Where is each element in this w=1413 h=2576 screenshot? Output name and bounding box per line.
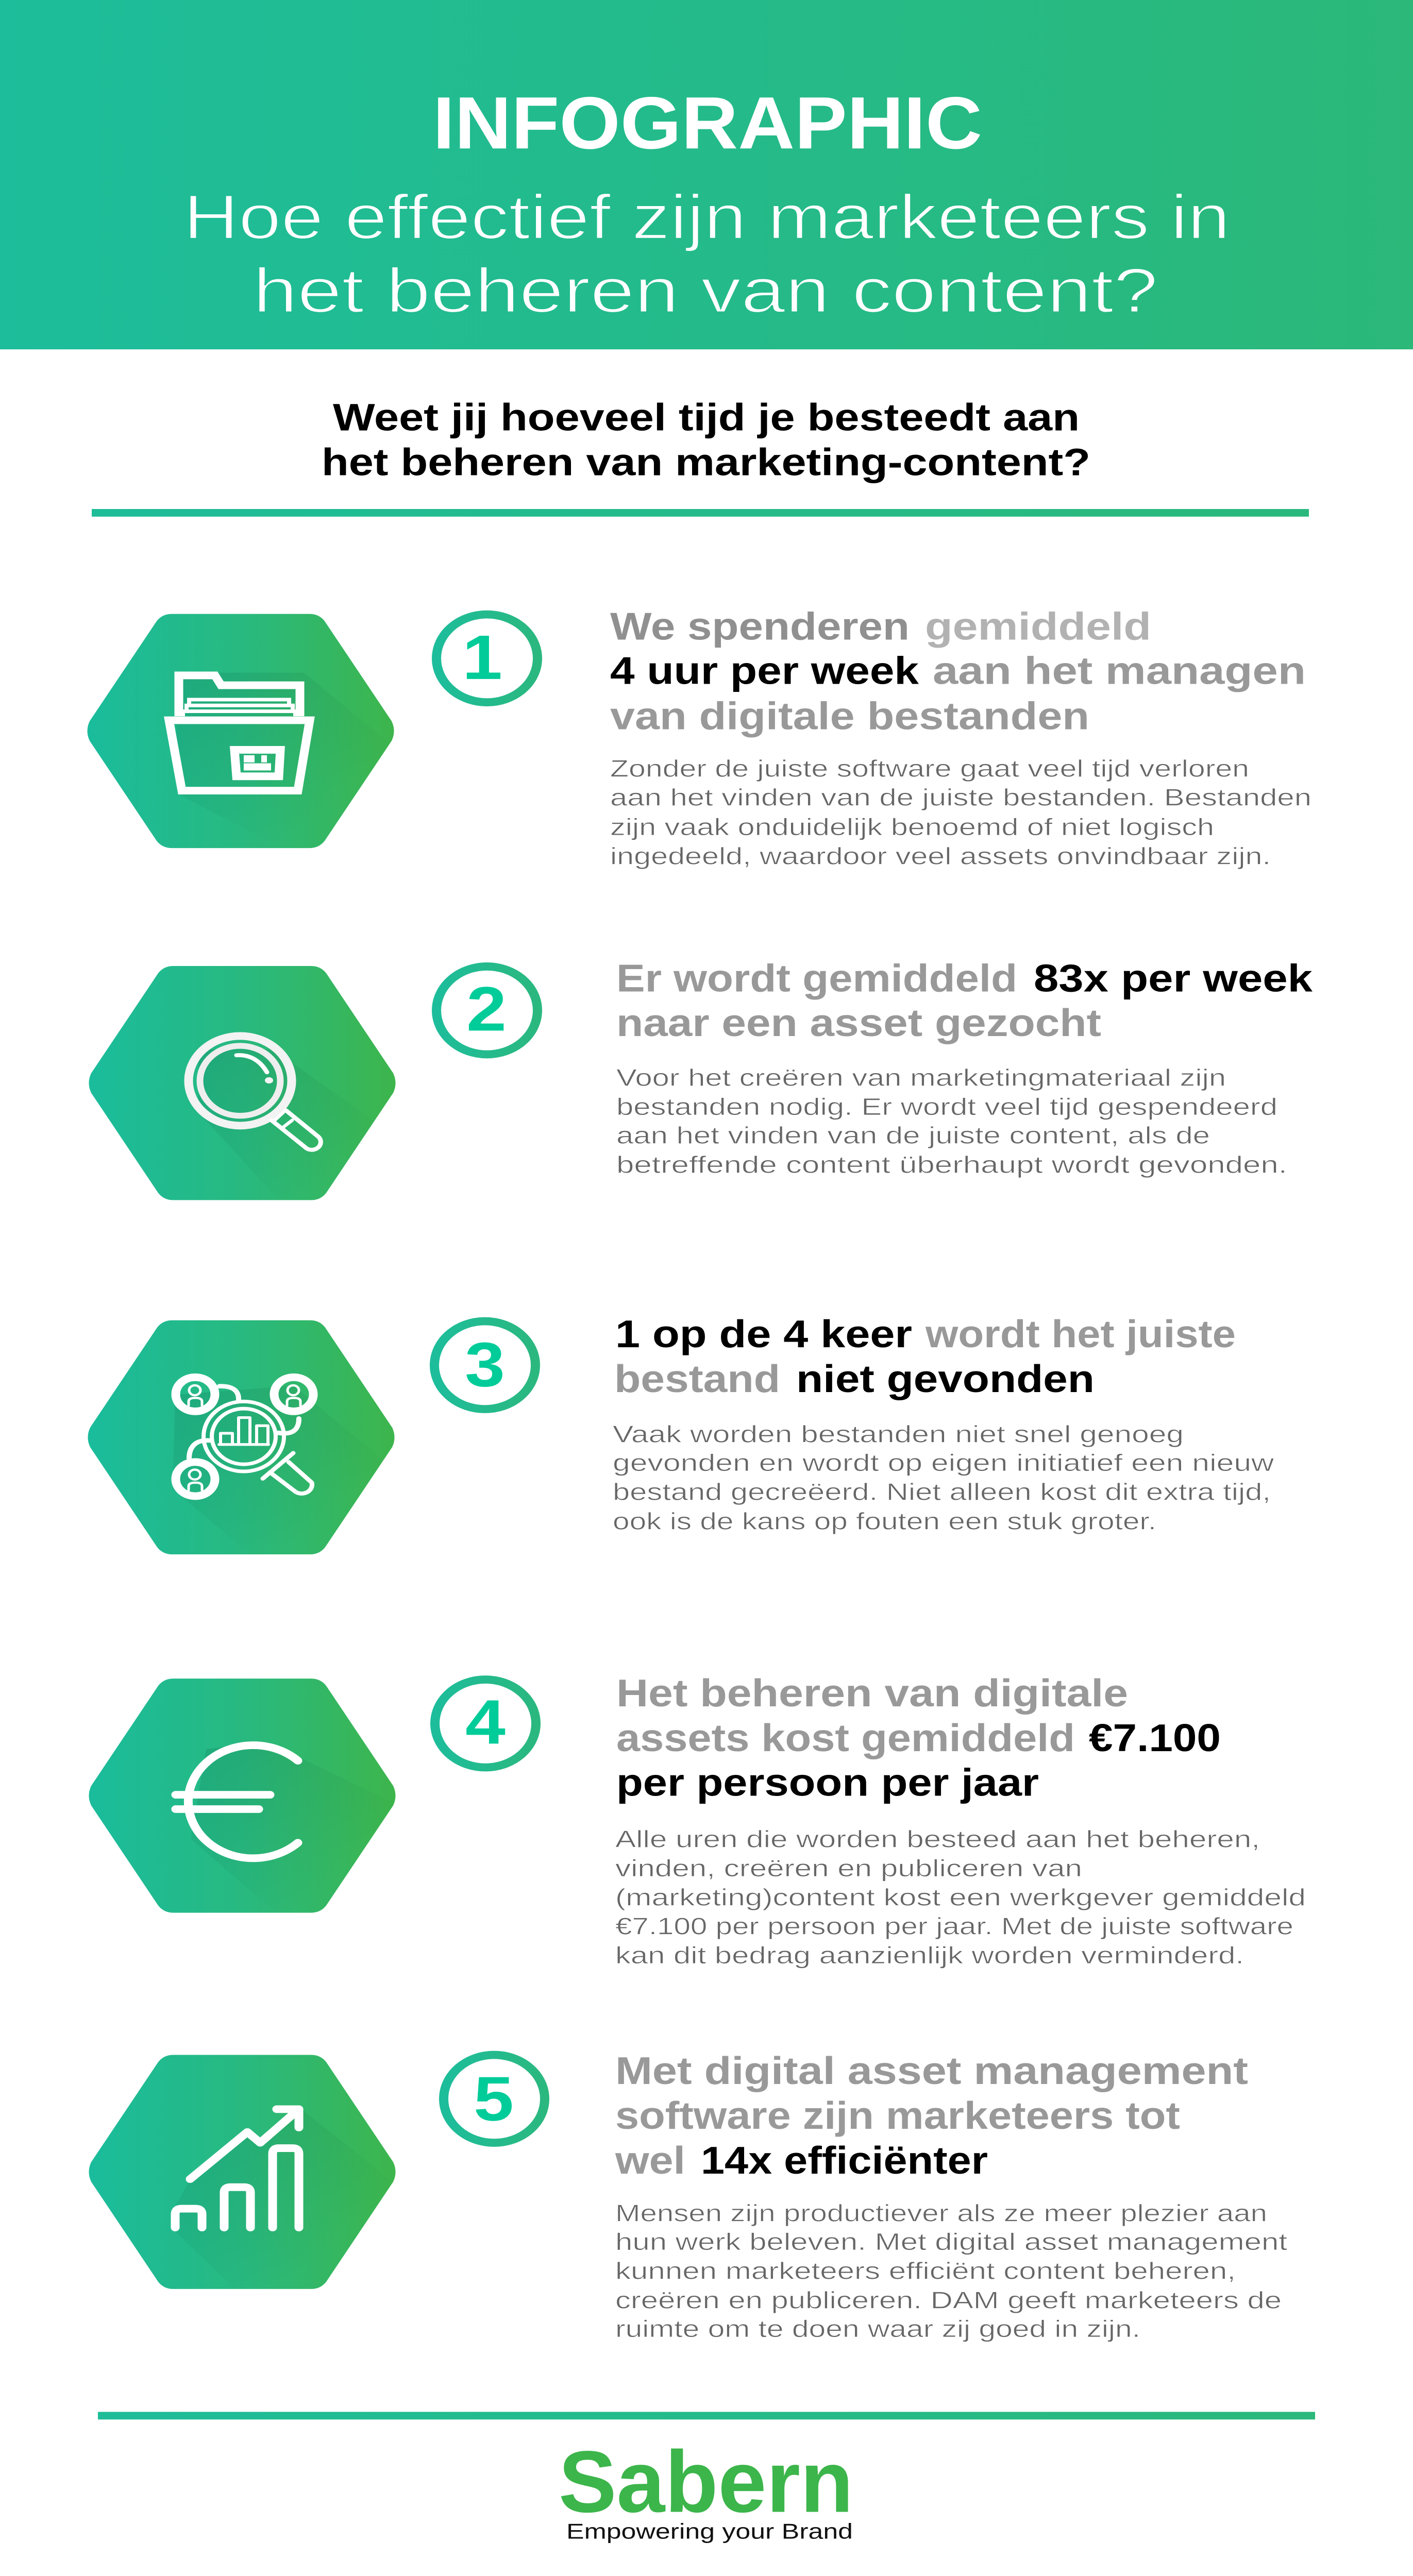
intro question: het beheren van marketing-content?: [322, 441, 1090, 483]
body text 3: bestand gecreëerd. Niet alleen kost dit extra tijd,: [613, 1479, 1271, 1505]
heading 5: [615, 2049, 1248, 2182]
top divider: [92, 509, 1309, 517]
body text 4: vinden, creëren en publiceren van: [615, 1855, 1082, 1882]
heading 5: software zijn marketeers tot: [615, 2094, 1180, 2138]
bottom divider: [98, 2412, 1315, 2419]
number badge 1: [436, 615, 537, 702]
intro question: Weet jij hoeveel tijd je besteedt aan: [333, 396, 1080, 438]
body text 3: [613, 1421, 1274, 1535]
logo: Sabern: Sabern: [559, 2433, 853, 2531]
title: INFOGRAPHIC: [433, 81, 982, 164]
body text 1: Zonder de juiste software gaat veel tijd verloren: [610, 755, 1249, 782]
heading 2: Er wordt gemiddeld: [616, 957, 1017, 1000]
intro question: [322, 396, 1090, 483]
subtitle: het beheren van content?: [253, 255, 1158, 326]
heading 1: 4 uur per week: [610, 650, 919, 692]
tagline: Empowering your Brand: [566, 2519, 853, 2544]
heading 3: bestand: [614, 1358, 780, 1401]
number badge 2: 2: [466, 974, 507, 1044]
body text 3: ook is de kans op fouten een stuk groter.: [613, 1508, 1156, 1535]
body text 5: Mensen zijn productiever als ze meer plezier aan: [615, 2200, 1267, 2227]
heading 3: 1 op de 4 keer: [615, 1313, 912, 1356]
number badge 3: [434, 1321, 535, 1409]
body text 1: aan het vinden van de juiste bestanden. Bestanden: [610, 784, 1311, 811]
body text 1: ingedeeld, waardoor veel assets onvindbaar zijn.: [610, 843, 1271, 870]
heading 4: per persoon per jaar: [616, 1761, 1039, 1804]
icon: hexagon with magnifying glass: [89, 966, 412, 1211]
panel: step 3: [88, 1313, 1274, 1561]
body text 4: [615, 1826, 1306, 1969]
heading 4: Het beheren van digitale: [616, 1672, 1128, 1715]
heading 4: €7.100: [1089, 1717, 1221, 1760]
body text 5: [615, 2200, 1287, 2342]
heading 1: We spenderen: [610, 605, 910, 648]
body text 5: kunnen marketeers efficiënt content beheren,: [615, 2258, 1236, 2284]
icon: hexagon with growth chart: [89, 2055, 412, 2296]
body text 3: gevonden en wordt op eigen initiatief een nieuw: [613, 1449, 1274, 1476]
icon: hexagon with people and chart magnifier: [88, 1320, 412, 1561]
body text 2: [616, 1064, 1287, 1178]
heading 5: Met digital asset management: [615, 2049, 1248, 2093]
heading 3: [614, 1313, 1236, 1401]
panel: step 1: [88, 605, 1311, 870]
subtitle: [183, 182, 1230, 326]
heading 1: aan het managen: [933, 650, 1306, 692]
heading 2: naar een asset gezocht: [616, 1002, 1101, 1045]
number badge 3: 3: [465, 1329, 505, 1400]
heading 1: van digitale bestanden: [610, 695, 1089, 738]
number badge 2: [436, 967, 537, 1054]
body text 4: kan dit bedrag aanzienlijk worden verminderd.: [615, 1942, 1244, 1969]
header banner: [0, 0, 1413, 349]
number badge 5: 5: [474, 2063, 514, 2134]
heading 2: [616, 957, 1313, 1045]
heading 5: wel: [615, 2139, 685, 2182]
body text 4: Alle uren die worden besteed aan het beheren,: [615, 1826, 1260, 1853]
body text 2: aan het vinden van de juiste content, als de: [616, 1122, 1210, 1149]
heading 1: [610, 605, 1306, 738]
heading 3: niet gevonden: [796, 1358, 1095, 1401]
body text 4: (marketing)content kost een werkgever gemiddeld: [615, 1884, 1306, 1911]
body text 1: [610, 755, 1311, 870]
number badge 4: 4: [465, 1687, 506, 1757]
heading 4: assets kost gemiddeld: [616, 1717, 1075, 1760]
panel: step 4: [89, 1672, 1306, 1969]
heading 3: wordt het juiste: [925, 1313, 1236, 1356]
heading 5: 14x efficiënter: [701, 2139, 988, 2182]
body text 2: bestanden nodig. Er wordt veel tijd gespendeerd: [616, 1093, 1277, 1120]
body text 3: Vaak worden bestanden niet snel genoeg: [613, 1421, 1184, 1448]
heading 2: 83x per week: [1034, 957, 1313, 1000]
icon: hexagon with folder: [88, 614, 412, 852]
heading 1: gemiddeld: [925, 605, 1151, 648]
icon: hexagon with euro sign: [89, 1679, 412, 1924]
body text 5: hun werk beleven. Met digital asset management: [615, 2228, 1287, 2255]
body text 5: ruimte om te doen waar zij goed in zijn.: [615, 2315, 1140, 2342]
number badge 5: [444, 2055, 545, 2143]
body text 1: zijn vaak onduidelijk benoemd of niet logisch: [610, 814, 1214, 840]
number badge 4: [435, 1680, 536, 1768]
body text 5: creëren en publiceren. DAM geeft marketeers de: [615, 2287, 1282, 2314]
subtitle: Hoe effectief zijn marketeers in: [183, 182, 1230, 252]
body text 4: €7.100 per persoon per jaar. Met de juiste software: [615, 1913, 1293, 1940]
panel: step 2: [89, 957, 1313, 1211]
heading 4: [616, 1672, 1221, 1804]
panel: step 5: [89, 2049, 1287, 2342]
body text 2: Voor het creëren van marketingmateriaal zijn: [616, 1064, 1226, 1091]
number badge 1: 1: [462, 622, 502, 692]
body text 2: betreffende content überhaupt wordt gevonden.: [616, 1151, 1287, 1178]
